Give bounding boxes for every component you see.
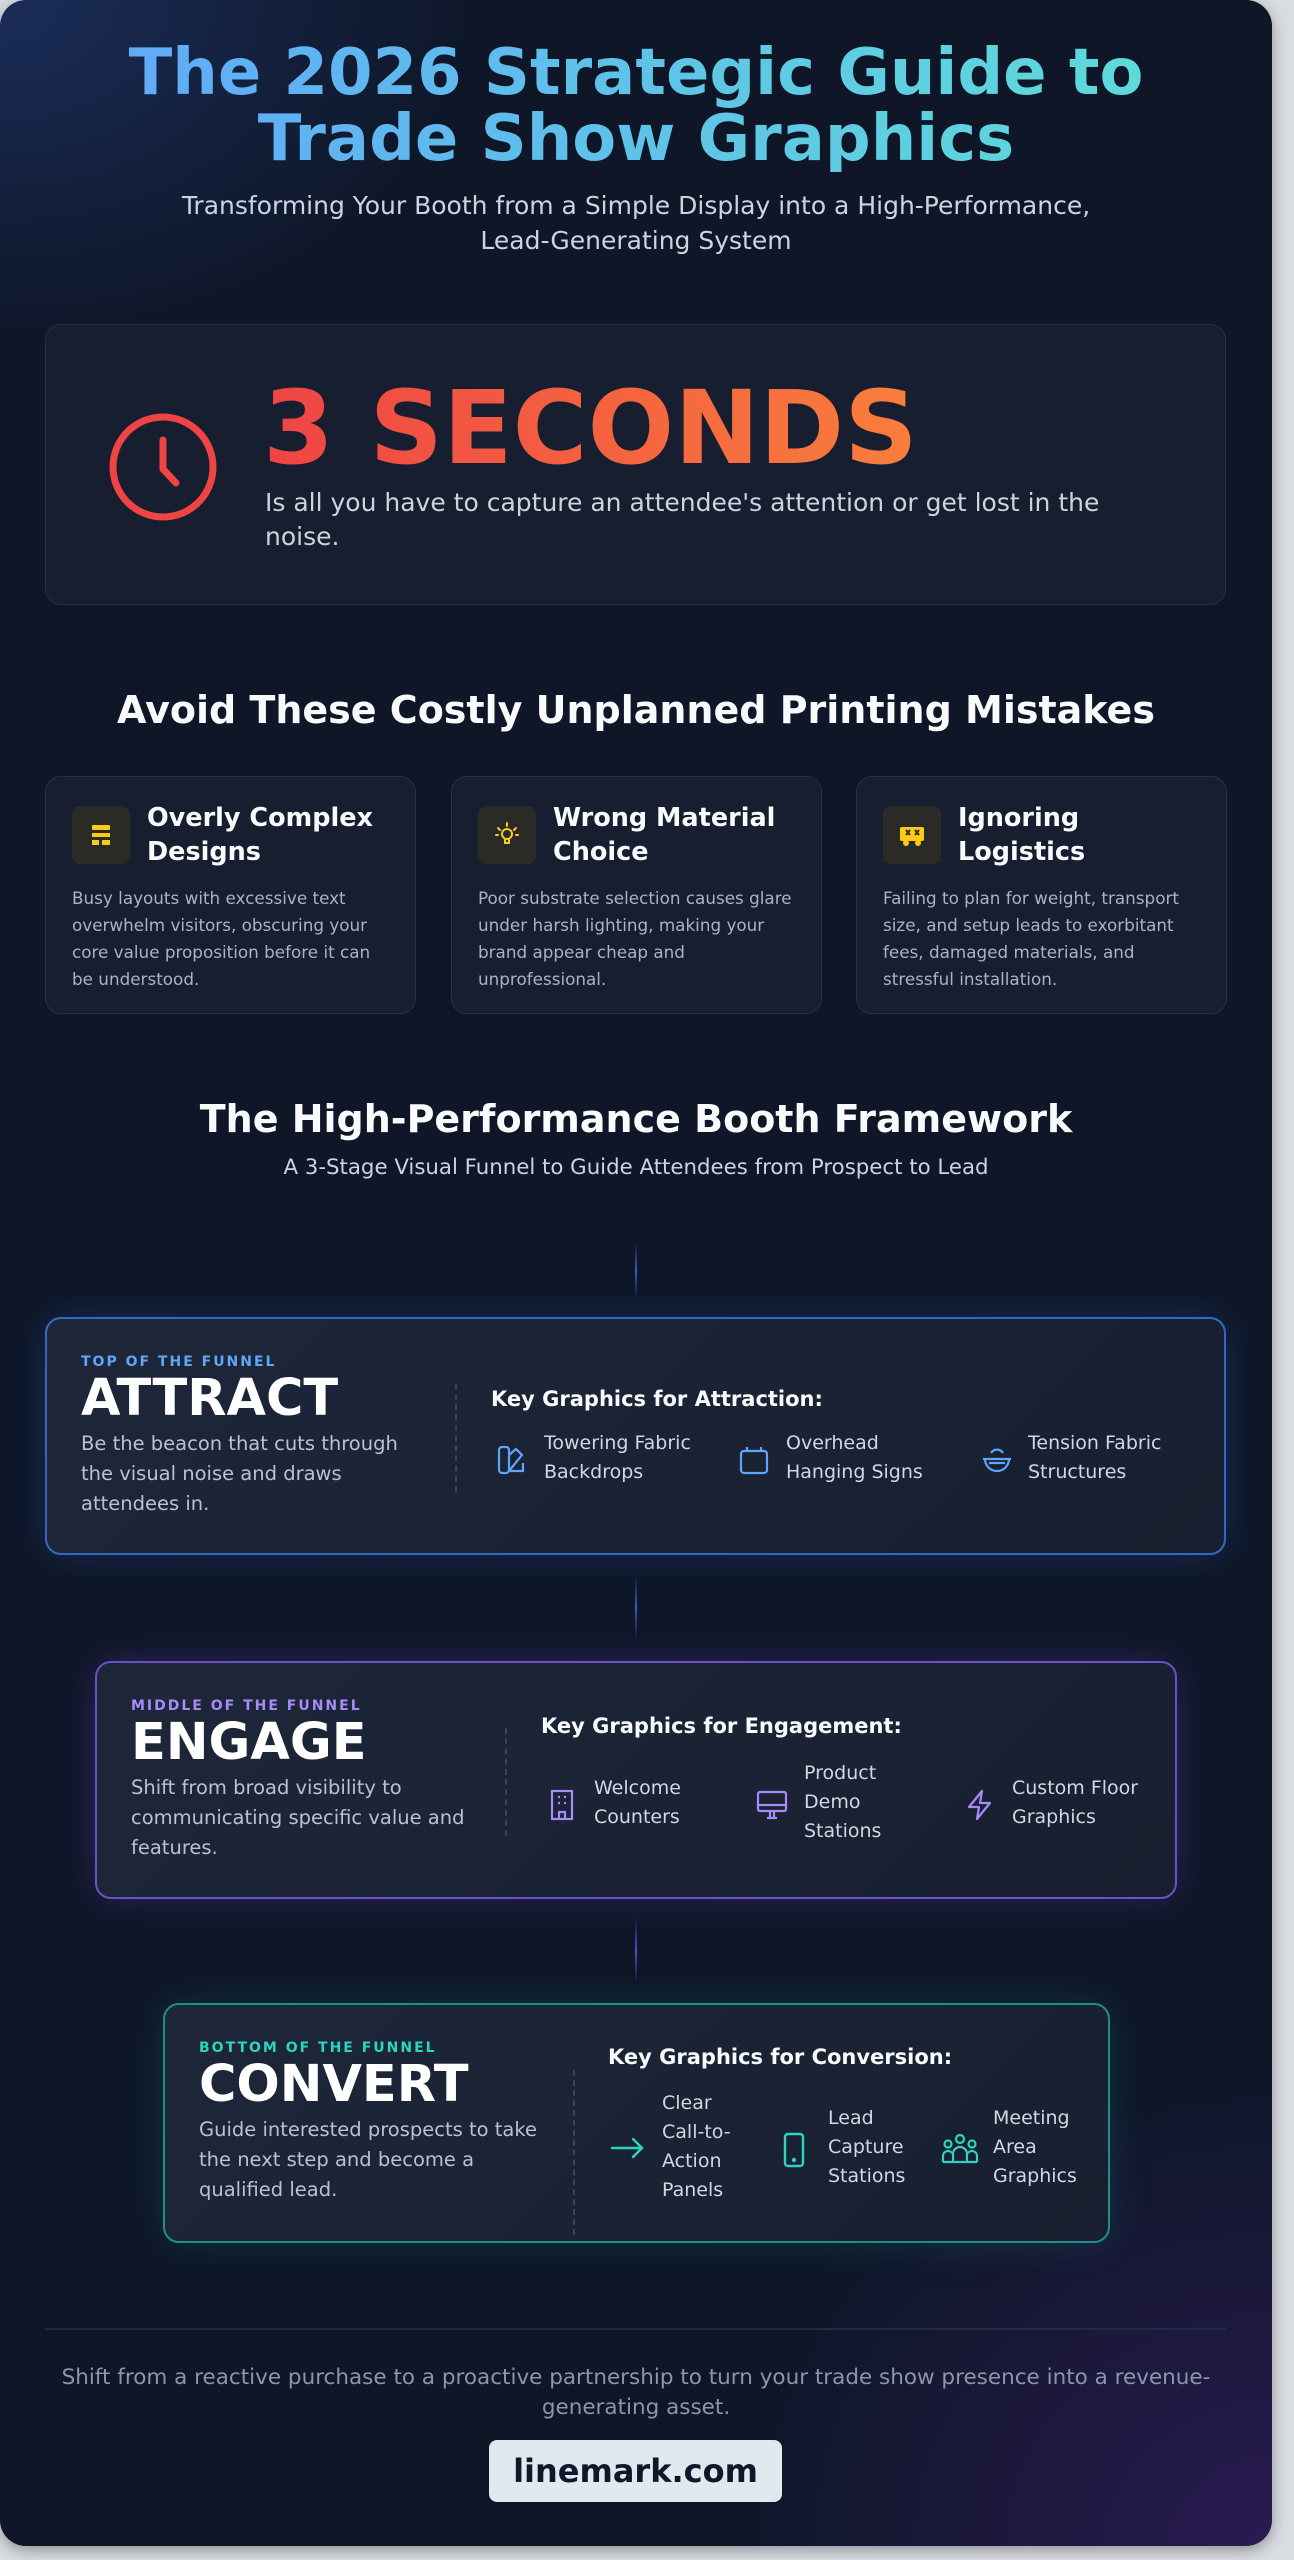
item: backdrops: Towering Fabric xyxy=(544,1432,691,1454)
item: welcome counters xyxy=(550,1777,681,1828)
title: Trade Show Graphics xyxy=(258,102,1014,176)
title: The 2026 Strategic Guide to xyxy=(129,36,1143,110)
button: website xyxy=(489,2440,782,2502)
subtitle xyxy=(182,191,1090,255)
mistake title: Designs xyxy=(147,837,261,867)
panel: 3 seconds xyxy=(45,324,1226,605)
item: tension fabric: Structures xyxy=(1028,1461,1126,1483)
panel: mistake 1 xyxy=(45,776,416,1014)
icon: complex designs xyxy=(72,806,130,864)
item: lead capture: Capture xyxy=(828,2136,904,2158)
key graphics heading: Key Graphics for Conversion: xyxy=(608,2045,952,2069)
item: call to action: Panels xyxy=(662,2179,723,2201)
item: hanging signs xyxy=(740,1432,923,1483)
heading: mistakes: Avoid These Costly Unplanned Printing Mistakes xyxy=(117,688,1155,732)
label: BOTTOM OF THE FUNNEL xyxy=(199,2040,437,2056)
item: floor graphics: Custom Floor xyxy=(1012,1777,1138,1799)
mistake text: Failing to plan for weight, transport size, and setup leads to exorbitant fees, damaged materials, and stressful installation. xyxy=(883,888,1179,989)
mistake title: Choice xyxy=(553,837,649,867)
item: backdrops xyxy=(498,1432,691,1483)
item: backdrops: Backdrops xyxy=(544,1461,643,1483)
button: website: linemark.com xyxy=(513,2452,758,2490)
icon: clock xyxy=(110,414,216,520)
item: tension fabric: Tension Fabric xyxy=(1028,1432,1161,1454)
item: meeting area: Area xyxy=(993,2136,1037,2158)
icon: logistics xyxy=(883,806,941,864)
stage description: Guide interested prospects to take the next step and become a qualified lead. xyxy=(199,2118,537,2201)
item: lead capture: Lead xyxy=(828,2107,874,2129)
item: call to action xyxy=(610,2092,731,2201)
arrow: connector 2 xyxy=(635,1575,637,1640)
item: demo stations: Demo xyxy=(804,1791,860,1813)
item: floor graphics: Graphics xyxy=(1012,1806,1096,1828)
mistake title: Ignoring xyxy=(958,803,1079,833)
item: demo stations: Stations xyxy=(804,1820,881,1842)
heading: framework: The High-Performance Booth Framework xyxy=(200,1097,1072,1141)
item: hanging signs: Hanging Signs xyxy=(786,1461,923,1483)
stat description: Is all you have to capture an attendee's attention or get lost in the noise. xyxy=(265,488,1099,551)
stage name: ENGAGE xyxy=(131,1713,367,1772)
mistake text: Poor substrate selection causes glare under harsh lighting, making your brand appear cheap and unprofessional. xyxy=(478,888,792,989)
item: hanging signs: Overhead xyxy=(786,1432,879,1454)
item: call to action: Action xyxy=(662,2150,722,2172)
item: tension fabric xyxy=(983,1432,1161,1483)
item: call to action: Clear xyxy=(662,2092,712,2114)
item: meeting area xyxy=(942,2107,1077,2187)
item: floor graphics xyxy=(968,1777,1138,1828)
item: demo stations xyxy=(756,1762,881,1842)
key graphics heading: Key Graphics for Attraction: xyxy=(491,1387,823,1411)
item: call to action: Call-to- xyxy=(662,2121,731,2143)
mistake title xyxy=(958,803,1085,867)
panel: attract xyxy=(45,1317,1226,1555)
mistake title: Wrong Material xyxy=(553,803,775,833)
mistake title: Overly Complex xyxy=(147,803,373,833)
arrow: connector 1 xyxy=(635,1242,637,1299)
panel: engage xyxy=(95,1661,1177,1899)
item: meeting area: Meeting xyxy=(993,2107,1070,2129)
stage name: ATTRACT xyxy=(81,1369,338,1428)
panel: convert xyxy=(163,2003,1110,2243)
stage name: CONVERT xyxy=(199,2055,469,2114)
item: lead capture xyxy=(784,2107,905,2187)
panel: mistake 3 xyxy=(856,776,1227,1014)
icon: lightbulb xyxy=(478,806,536,864)
arrow: connector 3 xyxy=(635,1918,637,1983)
item: lead capture: Stations xyxy=(828,2165,905,2187)
mistake text: Busy layouts with excessive text overwhelm visitors, obscuring your core value proposition before it can be understood. xyxy=(72,888,370,989)
stage description: Be the beacon that cuts through the visual noise and draws attendees in. xyxy=(81,1432,398,1515)
mistake title: Logistics xyxy=(958,837,1085,867)
item: welcome counters: Welcome xyxy=(594,1777,681,1799)
subtitle: Transforming Your Booth from a Simple Display into a High-Performance, xyxy=(182,191,1090,220)
stage description: Shift from broad visibility to communicating specific value and features. xyxy=(131,1776,464,1859)
footer text: Shift from a reactive purchase to a proactive partnership to turn your trade show presence into a revenue-generating asset. xyxy=(62,2365,1210,2420)
mistake title xyxy=(147,803,373,867)
panel: mistake 2 xyxy=(451,776,822,1014)
mistake title xyxy=(553,803,775,867)
framework subtitle: A 3-Stage Visual Funnel to Guide Attendees from Prospect to Lead xyxy=(283,1155,989,1180)
item: welcome counters: Counters xyxy=(594,1806,680,1828)
item: meeting area: Graphics xyxy=(993,2165,1077,2187)
stat: 3 seconds: 3 SECONDS xyxy=(263,369,918,488)
item: demo stations: Product xyxy=(804,1762,876,1784)
label: TOP OF THE FUNNEL xyxy=(81,1354,276,1370)
label: MIDDLE OF THE FUNNEL xyxy=(131,1698,362,1714)
subtitle: Lead-Generating System xyxy=(480,226,792,255)
title xyxy=(0,40,1272,172)
key graphics heading: Key Graphics for Engagement: xyxy=(541,1714,902,1738)
